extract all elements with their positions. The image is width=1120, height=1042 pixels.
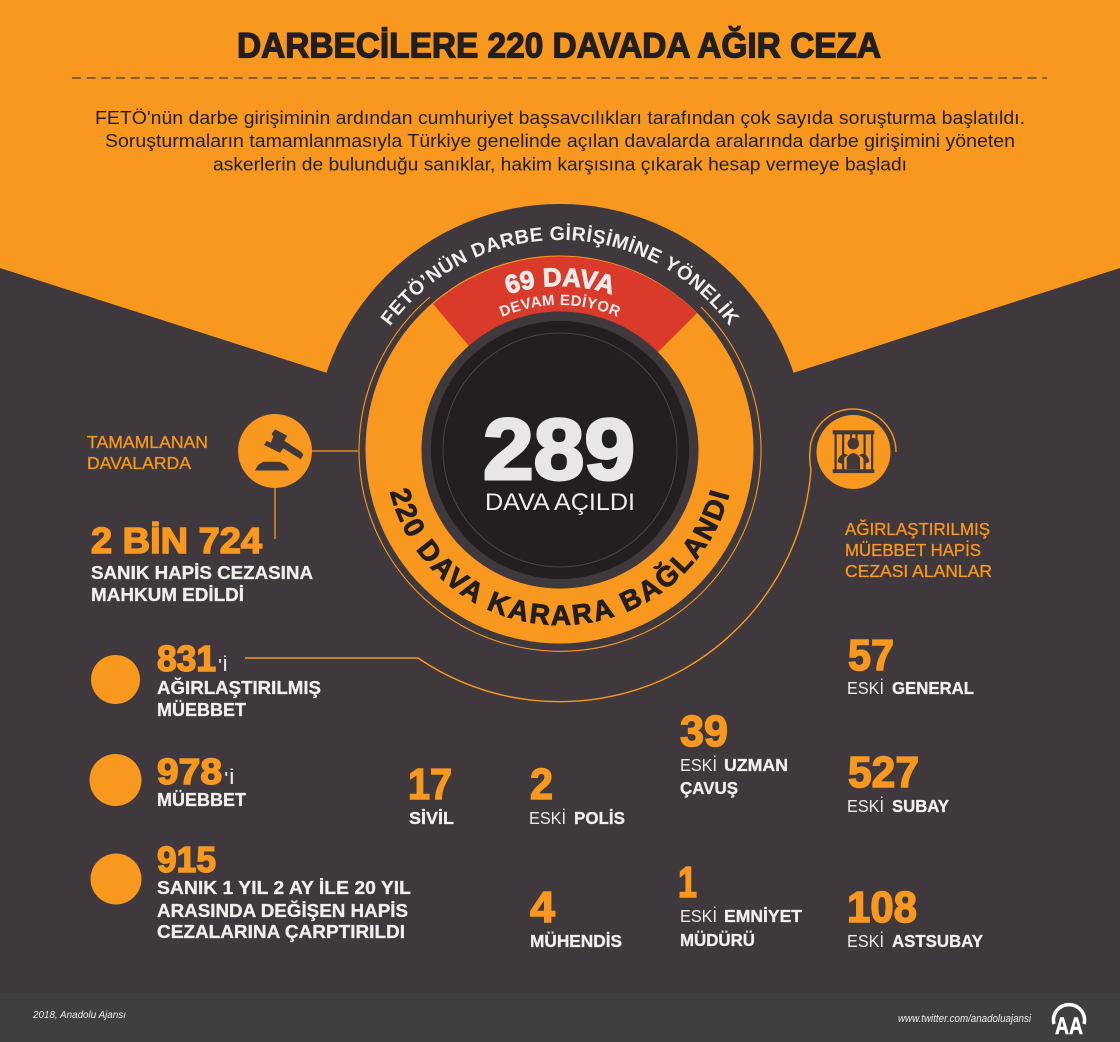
stat: 527 eski subay: ESKİ [847, 796, 884, 816]
dava acildi: DAVA AÇILDI [485, 489, 635, 516]
stat: 4 muhendis: 4 [530, 883, 556, 932]
289: 289 [483, 402, 635, 498]
stat: 108 eski astsubay: ASTSUBAY [892, 931, 983, 951]
stat: 57 eski general: GENERAL [892, 678, 974, 698]
stat: 978: 978 [157, 751, 222, 792]
stat: 831 [91, 638, 321, 720]
stat: 39 eski uzman cavus [680, 707, 788, 798]
stat: 108 eski astsubay: 108 [847, 883, 917, 932]
stat: 57 eski general: 57 [848, 631, 894, 680]
label: tamamlanan davalarda: TAMAMLANAN [87, 432, 208, 452]
stat: 17 sivil [408, 760, 454, 828]
stat: 915: CEZALARINA ÇARPTIRILDI [157, 921, 405, 942]
stat: 915: ARASINDA DEĞİŞEN HAPİS [157, 900, 408, 921]
stat: 978: 'İ [224, 768, 235, 788]
stat: 831: 831 [157, 638, 216, 679]
stat: 831: MÜEBBET [157, 699, 247, 720]
center disc [422, 312, 698, 588]
curved 220 dava: 220 DAVA KARARA BAĞLANDI [390, 488, 730, 626]
label: agirlastirilmis muebbet hapis cezasi alanlar [845, 518, 992, 581]
stat: 1 eski emniyet muduru: ESKİ [680, 906, 717, 926]
footer url: www.twitter.com/anadoluajansi [898, 1013, 1031, 1025]
intro text: Soruşturmaların tamamlanmasıyla Türkiye genelinde açılan davalarda aralarında darbe girişimini yöneten [105, 130, 1015, 151]
stat: 527 eski subay: SUBAY [892, 796, 949, 816]
stat: 1 eski emniyet muduru: MÜDÜRÜ [680, 930, 755, 950]
stat: 978: MÜEBBET [157, 789, 247, 810]
title: DARBECİLERE 220 DAVADA AĞIR CEZA [237, 26, 881, 66]
stat: 57 eski general: ESKİ [847, 678, 884, 698]
stat: 17 sivil: 17 [408, 760, 452, 809]
label: agirlastirilmis muebbet hapis cezasi alanlar: AĞIRLAŞTIRILMIŞ [845, 518, 990, 539]
stat: 2 bin 724: 2 BİN 724 [91, 520, 262, 561]
red segment: 69 cases [433, 257, 697, 360]
stat: 831: 'İ [218, 655, 228, 675]
stat: 2 bin 724 [91, 520, 313, 605]
intro text: FETÖ'nün darbe girişiminin ardından cumhuriyet başsavcılıkları tarafından çok sayıda soruşturma başlatıldı. [95, 107, 1025, 128]
stat: 527 eski subay: 527 [848, 748, 919, 797]
stat: 2 bin 724: MAHKUM EDİLDİ [91, 584, 244, 605]
label: tamamlanan davalarda: DAVALARDA [87, 453, 191, 473]
label: agirlastirilmis muebbet hapis cezasi alanlar: MÜEBBET HAPİS [845, 540, 981, 560]
icon: AA logo: AA [1055, 1013, 1083, 1040]
stat: 39 eski uzman cavus: 39 [680, 707, 728, 756]
label: agirlastirilmis muebbet hapis cezasi alanlar: CEZASI ALANLAR [845, 561, 992, 581]
stat: 2 eski polis: POLİS [574, 808, 625, 828]
stat: 831: AĞIRLAŞTIRILMIŞ [157, 677, 321, 698]
connector line to jail icon [245, 409, 896, 702]
stat: 39 eski uzman cavus: UZMAN [724, 755, 788, 775]
stat: 915: 915 [157, 839, 216, 880]
stat: 915 [90, 839, 411, 942]
icon: gavel [238, 414, 358, 539]
curved heading: FETÖ’NÜN DARBE GİRİŞİMİNE YÖNELİK [380, 223, 740, 326]
stat: 2 eski polis: ESKİ [529, 808, 566, 828]
stat: 2 eski polis [529, 760, 625, 828]
icon: AA logo [1054, 1005, 1085, 1040]
intro text [95, 107, 1025, 174]
icon: jailed figure [816, 415, 890, 489]
stat: 915: SANIK 1 YIL 2 AY İLE 20 YIL [157, 877, 411, 898]
stat: 108 eski astsubay [847, 883, 983, 951]
stat: 57 eski general [847, 631, 974, 698]
orange segment: 220 cases [366, 256, 754, 644]
stat: 2 bin 724: SANIK HAPİS CEZASINA [91, 562, 313, 583]
stat: 4 muhendis: MÜHENDİS [530, 931, 622, 951]
central donut chart [326, 204, 794, 652]
footer band [0, 993, 1120, 1042]
stat: 1 eski emniyet muduru [678, 858, 802, 950]
stat: 108 eski astsubay: ESKİ [847, 931, 884, 951]
stat: 1 eski emniyet muduru: 1 [678, 858, 697, 907]
label: tamamlanan davalarda [87, 432, 208, 473]
stat: 527 eski subay [847, 748, 949, 816]
stat: 17 sivil: SİVİL [409, 808, 454, 828]
thin ring outline [359, 297, 761, 651]
stat: 39 eski uzman cavus: ÇAVUŞ [680, 778, 738, 798]
stat: 1 eski emniyet muduru: EMNİYET [724, 906, 802, 926]
stat: 4 muhendis [530, 883, 622, 951]
stat: 978 [90, 751, 247, 810]
orange header shape [0, 0, 1120, 373]
footer credit: 2018, Anadolu Ajansı [32, 1009, 126, 1021]
stat: 2 eski polis: 2 [530, 760, 553, 809]
stat: 39 eski uzman cavus: ESKİ [680, 755, 717, 775]
intro text: askerlerin de bulunduğu sanıklar, hakim karşısına çıkarak hesap vermeye başladı [213, 154, 907, 174]
devam ediyor: DEVAM EDİYOR [499, 294, 620, 317]
69 dava: 69 DAVA [505, 268, 612, 295]
